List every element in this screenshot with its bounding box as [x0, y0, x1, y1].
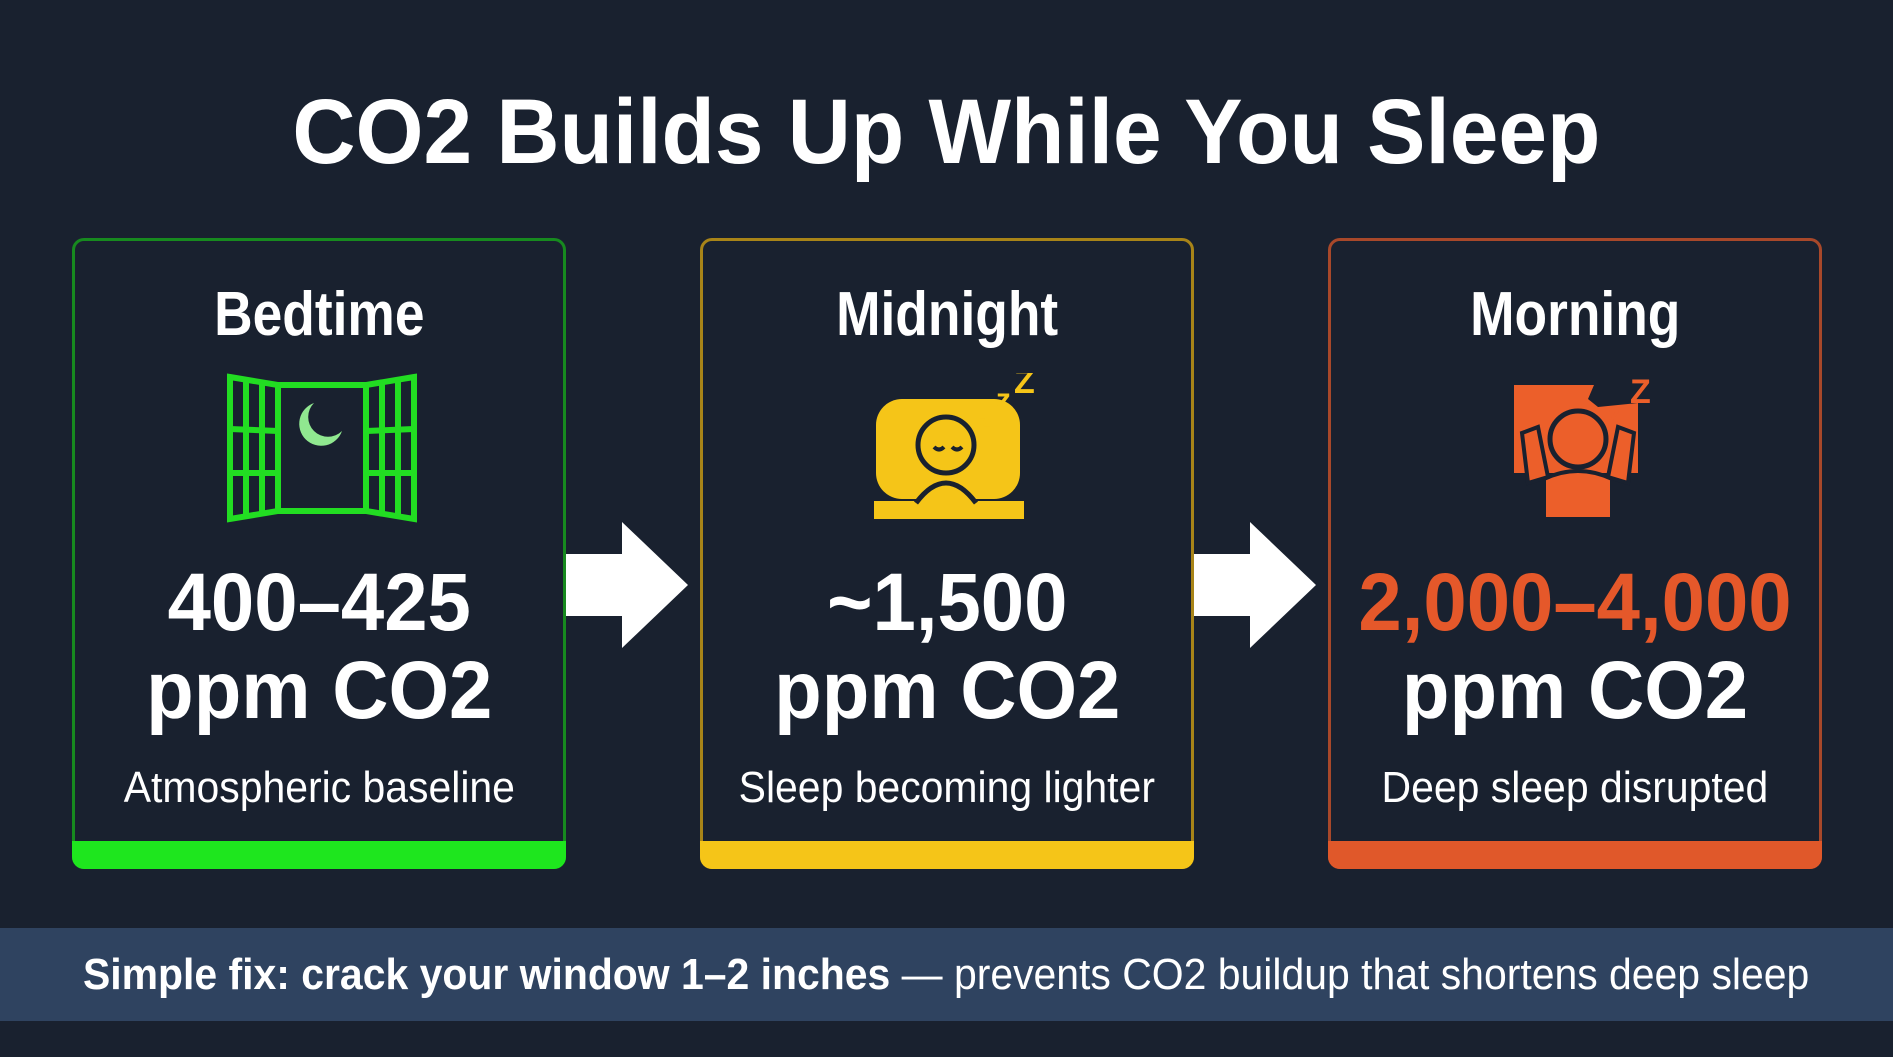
- subtitle: Deep sleep disrupted: [1382, 763, 1768, 812]
- icon: open window with moon: [227, 374, 417, 522]
- icon: sleeping person: z: [996, 383, 1011, 416]
- heading: midnight: Midnight: [836, 280, 1058, 349]
- value: 2,000–4,000 ppm: [1358, 557, 1792, 736]
- value: 2,000–4,000 ppm: 2,000–4,000: [1358, 557, 1792, 648]
- icon: restless person: z: [1608, 402, 1620, 429]
- value: 2,000–4,000 ppm: ppm CO2: [1402, 645, 1748, 736]
- value: 400–425 ppm: [146, 557, 492, 736]
- value: ~1,500 ppm: ~1,500: [827, 557, 1067, 648]
- heading: bedtime: Bedtime: [214, 280, 424, 349]
- arrow 1: [566, 522, 688, 648]
- title: CO2 Builds Up While You Sleep: [293, 81, 1600, 183]
- icon: sleeping person: [874, 373, 1035, 519]
- heading: morning: Morning: [1470, 280, 1680, 349]
- arrow 2: [1194, 522, 1316, 648]
- value: ~1,500 ppm: [774, 557, 1120, 736]
- icon: sleeping person: z: [978, 405, 991, 435]
- subtitle: Atmospheric baseline: [123, 763, 515, 812]
- panel: morning: [1328, 238, 1822, 869]
- value: ~1,500 ppm: ppm CO2: [774, 645, 1120, 736]
- panel: bedtime: [72, 238, 566, 869]
- subtitle: Sleep becoming lighter: [739, 763, 1155, 812]
- bottom banner: [0, 928, 1893, 1021]
- icon: restless person: [1514, 373, 1651, 517]
- icon: restless person: Z: [1630, 373, 1651, 411]
- panel: midnight: [700, 238, 1194, 869]
- value: 400–425 ppm: ppm CO2: [146, 645, 492, 736]
- banner text: Simple fix: crack your window 1–2 inches — prevents CO2 buildup that shortens deep sleep: [83, 950, 1810, 999]
- value: 400–425 ppm: 400–425: [167, 557, 471, 648]
